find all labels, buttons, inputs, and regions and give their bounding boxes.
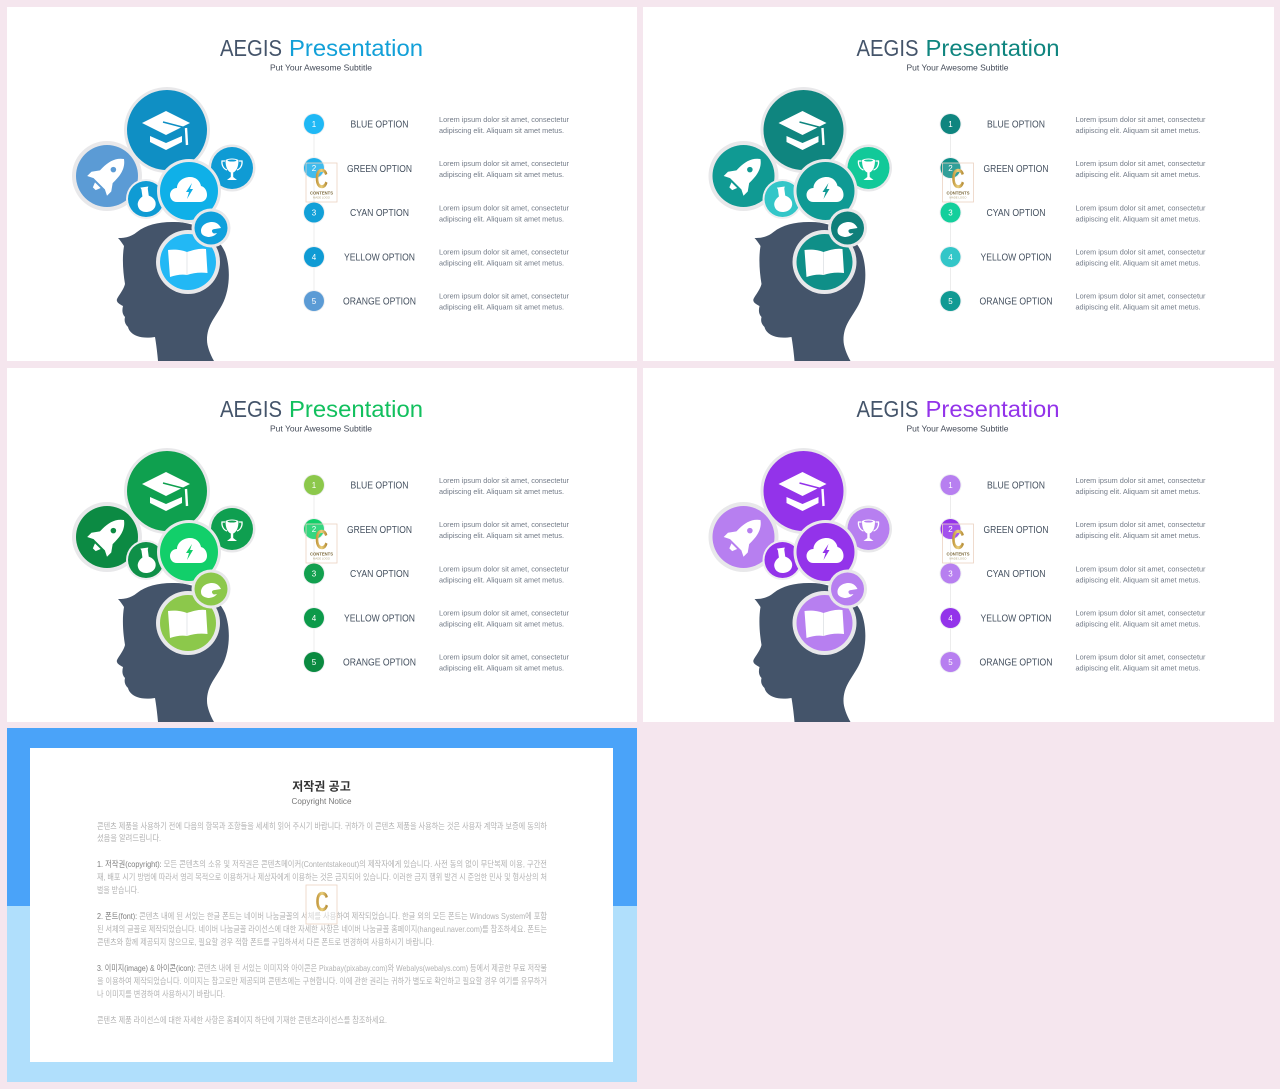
option row 1: Lorem ipsum dolor sit amet, consectetur bbox=[439, 115, 570, 124]
option row 5 bbox=[303, 651, 570, 673]
icon: flask bubble bbox=[762, 179, 802, 219]
option row 5 bbox=[940, 651, 1206, 673]
panel: copyright notice bbox=[7, 728, 637, 1082]
option row 3 bbox=[303, 562, 570, 584]
option row 1: 1 bbox=[312, 481, 317, 490]
option row 4 bbox=[303, 607, 570, 629]
option row 1: BLUE OPTION bbox=[987, 480, 1045, 492]
icon: graduation cap bubble bbox=[760, 87, 846, 173]
notice section 2: 콘텐츠와 함께 제공되지 않으므로, 필요할 경우 적합 폰트를 구입하셔서 다른 폰트로 변경하여 사용하시기 바랍니다. bbox=[97, 937, 434, 947]
option row 4: YELLOW OPTION bbox=[980, 252, 1052, 264]
notice section 3: 나 이미지를 변경하여 사용하시기 바랍니다. bbox=[97, 989, 225, 999]
option row 5 bbox=[303, 290, 570, 312]
option row 2: adipiscing elit. Aliquam sit amet metus. bbox=[1076, 170, 1200, 179]
option row 4: 4 bbox=[948, 253, 953, 262]
option row 3: CYAN OPTION bbox=[986, 208, 1046, 219]
option row 2: 2 bbox=[948, 525, 953, 534]
subtitle: Put Your Awesome Subtitle bbox=[906, 424, 1009, 434]
subtitle: Put Your Awesome Subtitle bbox=[270, 62, 372, 72]
option row 4: Lorem ipsum dolor sit amet, consectetur bbox=[1076, 608, 1206, 618]
notice section 1: 벌을 받습니다. bbox=[97, 885, 139, 895]
option row 3: CYAN OPTION bbox=[986, 569, 1046, 580]
icon: flask bubble bbox=[126, 540, 166, 580]
head silhouette bbox=[753, 583, 865, 722]
option row 4: 4 bbox=[312, 614, 317, 623]
icon: rocket bubble bbox=[72, 141, 142, 211]
option row 4: 4 bbox=[312, 253, 317, 262]
option row 4: Lorem ipsum dolor sit amet, consectetur bbox=[439, 608, 570, 618]
option row 3: adipiscing elit. Aliquam sit amet metus. bbox=[1076, 214, 1200, 224]
notice subheading: Copyright Notice bbox=[292, 796, 352, 806]
title bbox=[220, 396, 423, 422]
option row 3: 3 bbox=[948, 570, 953, 578]
option row 3: Lorem ipsum dolor sit amet, consectetur bbox=[439, 564, 570, 574]
icon: palette bubble bbox=[828, 570, 867, 608]
option row 2 bbox=[940, 157, 1206, 179]
icon: book bubble bbox=[156, 230, 220, 294]
option row 5 bbox=[940, 290, 1206, 312]
option row 3: Lorem ipsum dolor sit amet, consectetur bbox=[1076, 204, 1206, 212]
watermark bbox=[942, 524, 974, 563]
panel: teal variant bbox=[643, 7, 1274, 361]
option row 5: Lorem ipsum dolor sit amet, consectetur bbox=[439, 292, 570, 300]
option row 5: adipiscing elit. Aliquam sit amet metus. bbox=[439, 664, 564, 672]
title bbox=[220, 35, 423, 61]
option row 1: BLUE OPTION bbox=[987, 120, 1045, 130]
title bbox=[856, 396, 1060, 422]
icon: rocket bubble bbox=[708, 502, 778, 572]
icon: graduation cap bubble bbox=[760, 448, 846, 534]
watermark bbox=[306, 163, 337, 202]
option row 1: Lorem ipsum dolor sit amet, consectetur bbox=[1076, 476, 1206, 485]
notice section 1: 1. 저작권(copyright): 모든 콘텐츠의 소유 및 저작권은 콘텐츠메이커(Contentstakeout)의 제작자에게 있습니다. 사전 동의 없이 무단복제 이용, 구간전 bbox=[97, 859, 547, 869]
option row 1: adipiscing elit. Aliquam sit amet metus. bbox=[1076, 487, 1200, 496]
title: AEGIS bbox=[220, 35, 282, 61]
timeline line bbox=[950, 485, 952, 662]
option row 2: 2 bbox=[312, 164, 317, 173]
option row 2: 2 bbox=[312, 525, 317, 534]
notice heading: 저작권 공고 bbox=[292, 778, 351, 794]
option row 5: ORANGE OPTION bbox=[980, 658, 1052, 668]
timeline line bbox=[313, 485, 315, 662]
option row 2: Lorem ipsum dolor sit amet, consectetur bbox=[439, 159, 570, 168]
icon: trophy bubble bbox=[845, 144, 892, 192]
title: Presentation bbox=[289, 35, 423, 61]
option row 5: adipiscing elit. Aliquam sit amet metus. bbox=[1076, 664, 1200, 672]
option row 3 bbox=[303, 202, 570, 224]
head silhouette bbox=[117, 583, 229, 722]
subtitle: Put Your Awesome Subtitle bbox=[906, 62, 1009, 72]
title bbox=[856, 35, 1060, 61]
option row 4: YELLOW OPTION bbox=[344, 614, 415, 624]
notice footer: 콘텐츠 제품 라이선스에 대한 자세한 사항은 홈페이지 하단에 기재한 콘텐츠라이선스를 참조하세요. bbox=[97, 1015, 387, 1025]
notice section 1 bbox=[97, 859, 547, 895]
option row 1: 1 bbox=[948, 481, 953, 490]
title: Presentation bbox=[926, 35, 1060, 61]
option row 1: adipiscing elit. Aliquam sit amet metus. bbox=[1076, 126, 1200, 135]
option row 5: 5 bbox=[948, 297, 953, 306]
option row 3: 3 bbox=[312, 570, 317, 578]
notice intro bbox=[97, 821, 547, 843]
panel: blue variant bbox=[7, 7, 637, 361]
option row 4: Lorem ipsum dolor sit amet, consectetur bbox=[439, 248, 570, 256]
option row 5: adipiscing elit. Aliquam sit amet metus. bbox=[439, 302, 564, 312]
option row 2 bbox=[940, 518, 1206, 540]
option row 1: 1 bbox=[312, 120, 317, 129]
notice section 2: 된 서체의 글꼴로 제작되었습니다. 네이버 나눔글꼴 라이선스에 대한 자세한 사항은 네이버 나눔글꼴 홈페이지(hangeul.naver.com)를 참조하세요. 폰트는 bbox=[97, 924, 547, 934]
option row 4: adipiscing elit. Aliquam sit amet metus. bbox=[439, 620, 564, 628]
option row 1 bbox=[303, 113, 570, 135]
option row 4: adipiscing elit. Aliquam sit amet metus. bbox=[439, 258, 564, 268]
watermark bbox=[306, 885, 337, 924]
option row 1: adipiscing elit. Aliquam sit amet metus. bbox=[439, 487, 564, 496]
option row 2: Lorem ipsum dolor sit amet, consectetur bbox=[439, 520, 570, 529]
icon: graduation cap bubble bbox=[124, 87, 210, 173]
option row 4 bbox=[940, 607, 1206, 629]
icon: flask bubble bbox=[762, 540, 802, 580]
icon: book bubble bbox=[792, 591, 856, 655]
option row 5: Lorem ipsum dolor sit amet, consectetur bbox=[439, 652, 570, 662]
icon: trophy bubble bbox=[208, 144, 256, 192]
icon: flask bubble bbox=[126, 179, 166, 219]
option row 2 bbox=[303, 157, 570, 179]
panel: green variant bbox=[7, 368, 637, 722]
icon: rocket bubble bbox=[72, 502, 142, 572]
title: AEGIS bbox=[220, 396, 282, 422]
option row 1: Lorem ipsum dolor sit amet, consectetur bbox=[1076, 115, 1206, 124]
option row 5: 5 bbox=[312, 658, 317, 667]
icon: book bubble bbox=[156, 591, 220, 655]
option row 1 bbox=[940, 474, 1206, 496]
panel: purple variant bbox=[643, 368, 1274, 722]
notice section 3: 3. 이미지(image) & 아이콘(icon): 콘텐츠 내에 된 서있는 이미지와 아이콘은 Pixabay(pixabay.com)와 Webalys(webalys.com) 등에서 제공한 무료 저작물 bbox=[97, 963, 547, 973]
option row 5: Lorem ipsum dolor sit amet, consectetur bbox=[1076, 292, 1206, 300]
icon: palette bubble bbox=[192, 208, 230, 248]
watermark: C bbox=[316, 886, 328, 917]
option row 1: Lorem ipsum dolor sit amet, consectetur bbox=[439, 476, 570, 485]
icon: palette bubble bbox=[192, 570, 230, 608]
option row 1: BLUE OPTION bbox=[350, 480, 408, 492]
option row 3: Lorem ipsum dolor sit amet, consectetur bbox=[1076, 564, 1206, 574]
option row 2: adipiscing elit. Aliquam sit amet metus. bbox=[439, 170, 564, 179]
icon: cloud bubble bbox=[794, 159, 858, 223]
option row 3 bbox=[940, 202, 1206, 224]
notice intro: 셨음을 알려드립니다. bbox=[97, 833, 161, 843]
option row 1 bbox=[940, 113, 1206, 135]
option row 2: adipiscing elit. Aliquam sit amet metus. bbox=[439, 531, 564, 540]
option row 5: adipiscing elit. Aliquam sit amet metus. bbox=[1076, 302, 1200, 312]
option row 4: YELLOW OPTION bbox=[980, 614, 1052, 624]
option row 4: adipiscing elit. Aliquam sit amet metus. bbox=[1076, 258, 1200, 268]
title: Presentation bbox=[926, 396, 1060, 422]
notice section 3: 을 이용하여 제작되었습니다. 이미지는 참고로만 제공되며 콘텐츠에는 구현합니다. 이에 관한 권리는 귀하가 별도로 확인하고 필요할 경우 여기를 유무하거 bbox=[97, 976, 547, 986]
option row 3: CYAN OPTION bbox=[350, 569, 409, 580]
option row 5: 5 bbox=[312, 297, 317, 306]
icon: palette bubble bbox=[828, 208, 867, 248]
notice section 1: 재, 배포 시기 방법에 따라서 영리 목적으로 이용하거나 제삼자에게 이용하는 것은 금지되어 있습니다. 이러한 금지 행위 발견 시 준엄한 민사 및 형사상의 처 bbox=[97, 872, 547, 882]
option row 5: Lorem ipsum dolor sit amet, consectetur bbox=[1076, 652, 1206, 662]
icon: book bubble bbox=[792, 230, 856, 294]
option row 4 bbox=[303, 246, 570, 268]
icon: trophy bubble bbox=[208, 506, 256, 552]
option row 3: CYAN OPTION bbox=[350, 208, 409, 219]
timeline line bbox=[313, 124, 315, 301]
timeline line bbox=[950, 124, 952, 301]
option row 2: adipiscing elit. Aliquam sit amet metus. bbox=[1076, 531, 1200, 540]
notice section 2: 2. 폰트(font): 콘텐츠 내에 된 서있는 한글 폰트는 네이버 나눔글꼴의 서체를 사용하여 제작되었습니다. 한글 외의 모든 폰트는 Windows System에 포함 bbox=[97, 911, 547, 921]
option row 2: GREEN OPTION bbox=[984, 525, 1048, 536]
title: AEGIS bbox=[856, 35, 918, 61]
watermark bbox=[306, 524, 337, 563]
option row 3: Lorem ipsum dolor sit amet, consectetur bbox=[439, 204, 570, 212]
option row 2: Lorem ipsum dolor sit amet, consectetur bbox=[1076, 520, 1206, 529]
option row 2 bbox=[303, 518, 570, 540]
watermark bbox=[942, 163, 974, 202]
option row 1: adipiscing elit. Aliquam sit amet metus. bbox=[439, 126, 564, 135]
option row 2: GREEN OPTION bbox=[347, 164, 412, 175]
option row 2: 2 bbox=[948, 164, 953, 173]
icon: graduation cap bubble bbox=[124, 448, 210, 534]
option row 3: adipiscing elit. Aliquam sit amet metus. bbox=[1076, 576, 1200, 584]
icon: trophy bubble bbox=[845, 506, 892, 552]
option row 3 bbox=[940, 562, 1206, 584]
option row 1: 1 bbox=[948, 120, 953, 129]
option row 5: ORANGE OPTION bbox=[980, 296, 1052, 308]
option row 3: 3 bbox=[948, 208, 953, 218]
icon: cloud bubble bbox=[157, 159, 221, 223]
option row 5: ORANGE OPTION bbox=[343, 296, 416, 308]
title: AEGIS bbox=[856, 396, 918, 422]
option row 4 bbox=[940, 246, 1206, 268]
option row 4: adipiscing elit. Aliquam sit amet metus. bbox=[1076, 620, 1200, 628]
notice section 3 bbox=[97, 963, 547, 999]
option row 5: ORANGE OPTION bbox=[343, 658, 416, 668]
option row 1: BLUE OPTION bbox=[350, 120, 408, 130]
icon: cloud bubble bbox=[794, 520, 858, 584]
icon: rocket bubble bbox=[708, 141, 778, 211]
option row 3: 3 bbox=[312, 208, 317, 218]
option row 5: 5 bbox=[948, 658, 953, 667]
option row 1 bbox=[303, 474, 570, 496]
notice intro: 콘텐츠 제품을 사용하기 전에 다음의 항목과 조항들을 세세히 읽어 주시기 바랍니다. 귀하가 이 콘텐츠 제품을 사용하는 것은 사용자 계약과 보증에 동의하 bbox=[97, 821, 547, 831]
title: Presentation bbox=[289, 396, 423, 422]
option row 4: YELLOW OPTION bbox=[344, 252, 415, 264]
option row 3: adipiscing elit. Aliquam sit amet metus. bbox=[439, 214, 564, 224]
head silhouette bbox=[117, 222, 229, 361]
option row 2: GREEN OPTION bbox=[984, 164, 1048, 175]
subtitle: Put Your Awesome Subtitle bbox=[270, 424, 372, 434]
option row 3: adipiscing elit. Aliquam sit amet metus. bbox=[439, 576, 564, 584]
option row 4: 4 bbox=[948, 614, 953, 623]
notice section 2 bbox=[97, 911, 547, 947]
option row 2: Lorem ipsum dolor sit amet, consectetur bbox=[1076, 159, 1206, 168]
icon: cloud bubble bbox=[157, 520, 221, 584]
option row 4: Lorem ipsum dolor sit amet, consectetur bbox=[1076, 248, 1206, 256]
head silhouette bbox=[753, 222, 865, 361]
option row 2: GREEN OPTION bbox=[347, 525, 412, 536]
